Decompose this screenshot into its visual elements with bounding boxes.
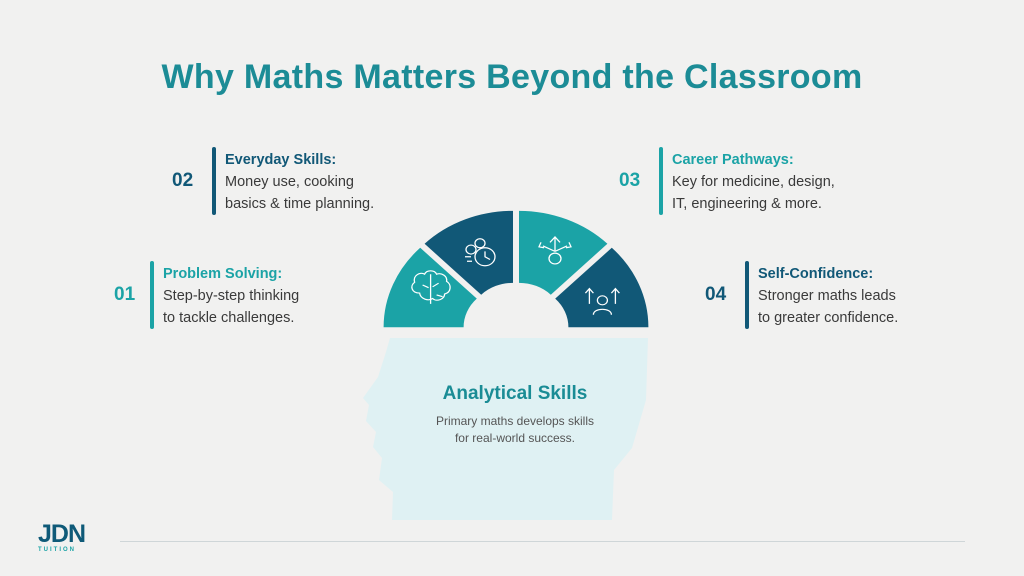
segment 2: coins and clock <box>425 211 513 295</box>
segment 3: career arrows <box>519 211 607 295</box>
segment 1: brain <box>384 248 477 327</box>
item 01: problem solving: Step-by-step thinking <box>163 288 299 304</box>
center text: analytical skills: Analytical Skills <box>443 383 587 404</box>
logo: JDN <box>38 520 85 548</box>
item 02: everyday skills: basics & time planning. <box>225 196 374 212</box>
item 04: self-confidence: to greater confidence. <box>758 310 898 326</box>
text: 03 <box>619 170 640 191</box>
footer line <box>120 541 965 542</box>
item 03: career pathways <box>619 147 835 215</box>
center text: analytical skills <box>436 383 594 445</box>
item 01: problem solving: Problem Solving: <box>163 266 282 282</box>
item 04: self-confidence: Self-Confidence: <box>758 266 873 282</box>
center text: analytical skills: Primary maths develops skills <box>436 414 594 428</box>
item 03: career pathways: Career Pathways: <box>672 152 794 168</box>
text: 02 <box>172 170 193 191</box>
item 02: everyday skills <box>172 147 374 215</box>
item 02: everyday skills: Everyday Skills: <box>225 152 336 168</box>
semicircle segments <box>384 211 648 327</box>
item 03: career pathways: IT, engineering & more. <box>672 196 822 212</box>
text: 04 <box>705 284 726 305</box>
item 04: self-confidence <box>705 261 898 329</box>
item 04: self-confidence: Stronger maths leads <box>758 288 896 304</box>
item 01: problem solving <box>114 261 299 329</box>
title: Why Maths Matters Beyond the Classroom <box>162 58 862 96</box>
segment 4: growth person <box>555 248 648 327</box>
logo: TUITION <box>38 547 76 553</box>
item 02: everyday skills: Money use, cooking <box>225 174 354 190</box>
item 01: problem solving: to tackle challenges. <box>163 310 294 326</box>
text: 01 <box>114 284 135 305</box>
head silhouette <box>363 338 648 520</box>
center text: analytical skills: for real-world success. <box>455 431 575 445</box>
item 03: career pathways: Key for medicine, design, <box>672 174 835 190</box>
